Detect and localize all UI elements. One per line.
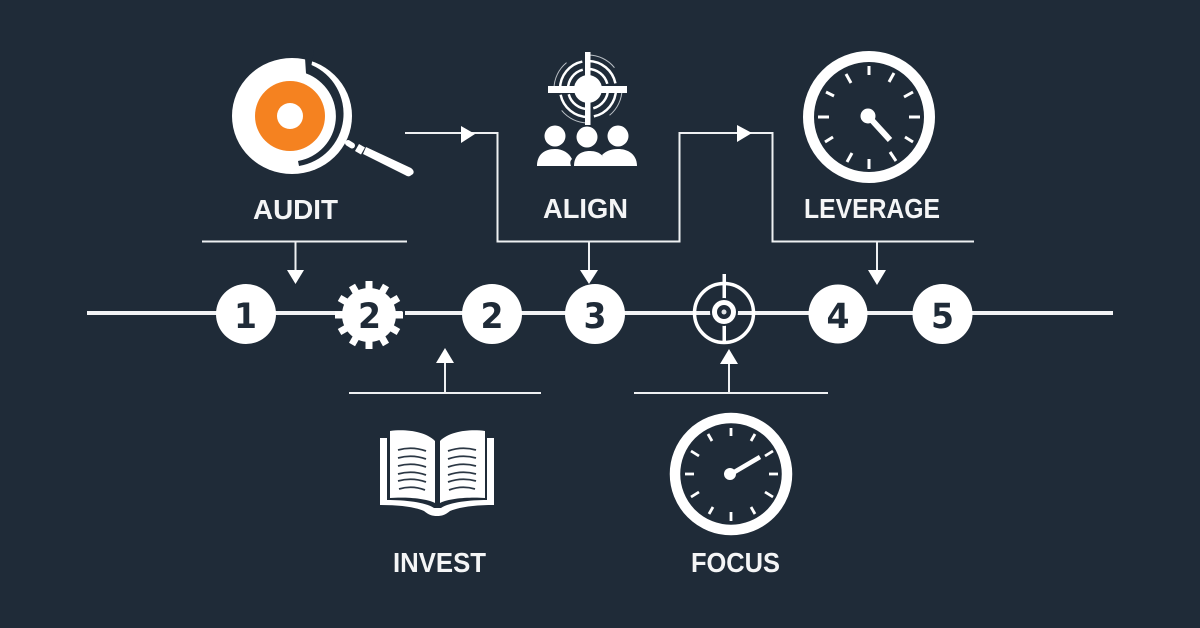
icon: clock for leverage <box>808 56 930 178</box>
marker: step 4: 4 <box>826 297 850 337</box>
marker: gear step 2: 2 <box>358 297 381 337</box>
heading: FOCUS: FOCUS <box>691 547 780 578</box>
marker: step 5 <box>912 284 972 344</box>
connector: audit bar and down arrow <box>202 242 407 284</box>
heading: INVEST: INVEST <box>393 547 486 578</box>
heading: AUDIT: AUDIT <box>253 194 338 225</box>
connector: audit to align path <box>405 126 598 284</box>
marker: crosshair target <box>694 274 754 344</box>
connector: focus bar and up arrow <box>634 349 828 393</box>
icon: target above team <box>537 52 637 166</box>
connector: invest bar and up arrow <box>349 348 541 393</box>
marker: step 3: 3 <box>584 297 606 337</box>
marker: step 1 <box>216 284 276 344</box>
marker: gear step 2 <box>335 281 405 349</box>
marker: step 2: 2 <box>480 297 504 337</box>
timeline axis <box>87 311 1113 315</box>
icon: magnifying glass with orange target <box>232 50 414 176</box>
heading: ALIGN: ALIGN <box>543 193 628 224</box>
heading: LEVERAGE: LEVERAGE <box>804 193 940 224</box>
connector: align to leverage path <box>589 125 974 285</box>
icon: open book <box>380 430 494 516</box>
marker: step 2 <box>462 284 522 344</box>
marker: step 3 <box>565 284 625 344</box>
marker: step 1: 1 <box>234 297 257 337</box>
marker: step 5: 5 <box>931 297 954 337</box>
icon: gauge clock for focus <box>675 418 787 530</box>
marker: step 4 <box>808 284 868 344</box>
